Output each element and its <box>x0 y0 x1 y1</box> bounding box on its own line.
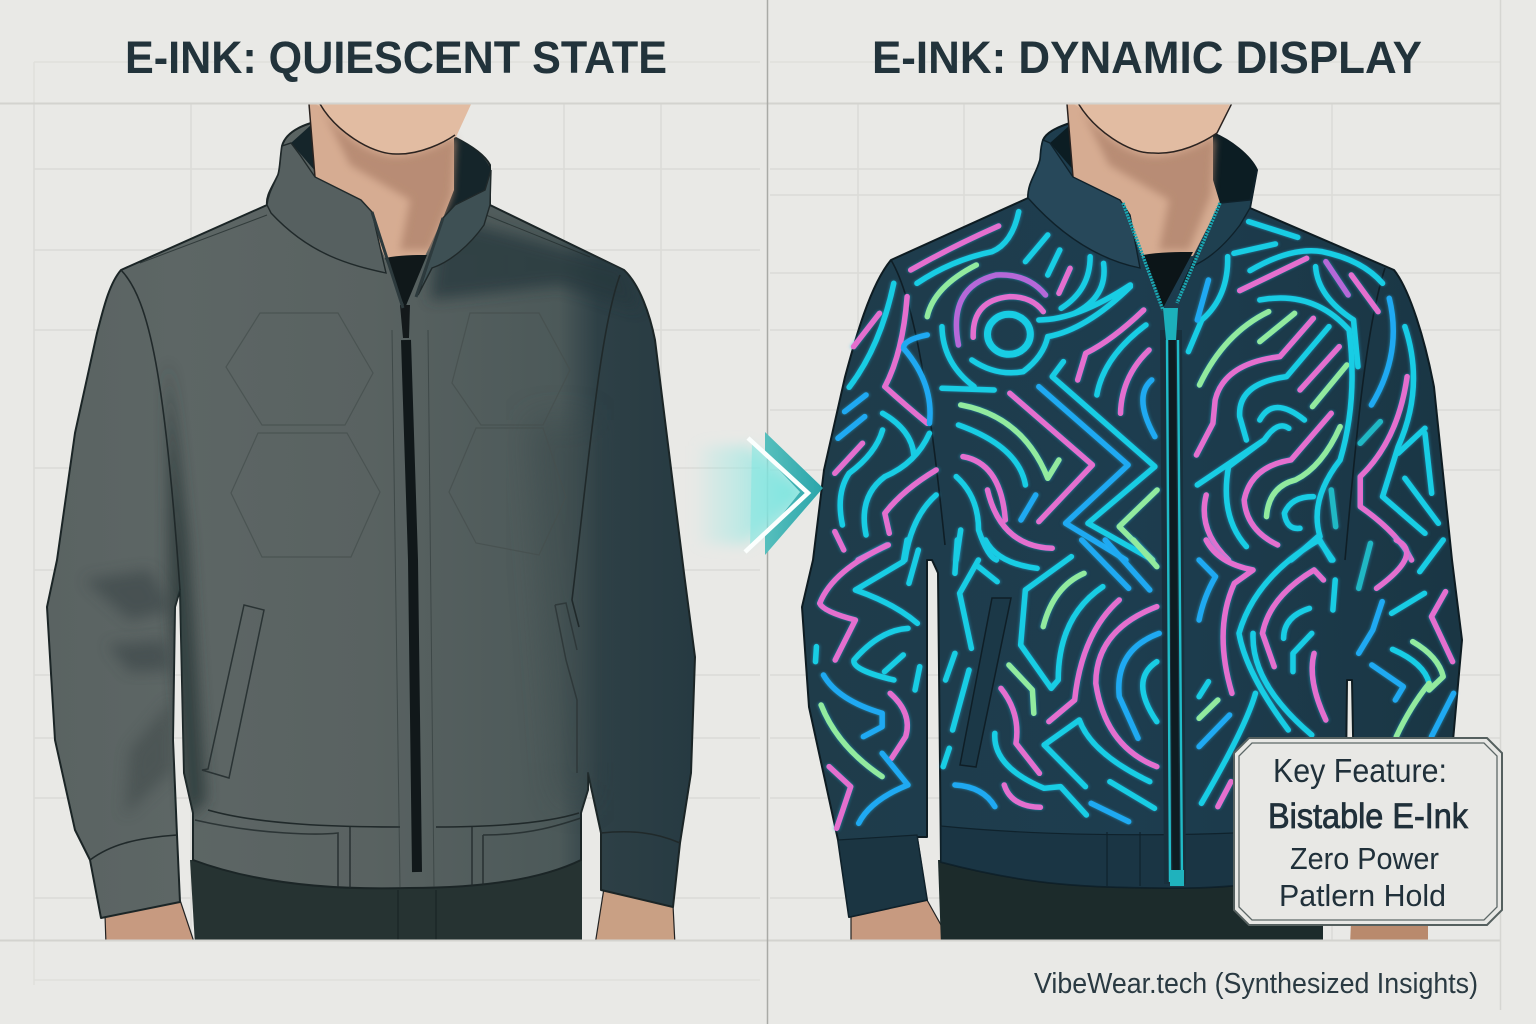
jacket body <box>47 123 695 918</box>
sleeve seams and cuffs <box>90 215 680 888</box>
arrow glow <box>695 446 804 544</box>
arrow white chevron <box>745 438 808 552</box>
callout inner frame <box>1239 743 1497 920</box>
hand right <box>595 892 676 940</box>
hand left <box>850 900 941 940</box>
band rules <box>0 104 1500 940</box>
zipper <box>1123 203 1220 882</box>
neck shadow <box>1081 108 1215 250</box>
pocket <box>960 598 1011 767</box>
trouser seam <box>398 890 436 945</box>
heading: quiescent state: E-INK: QUIESCENT STATE <box>125 32 667 83</box>
footer band <box>0 941 1536 1024</box>
lower right torso <box>1199 540 1335 807</box>
hem dividers <box>1107 832 1140 886</box>
pattern hold: Patlern Hold <box>1279 878 1446 913</box>
arrow body teal <box>765 432 823 555</box>
zipper pull <box>1163 308 1178 340</box>
cuff ribbing <box>838 835 927 917</box>
right cuff ribbing <box>1355 830 1445 905</box>
sleeve seams <box>891 260 1385 560</box>
right sleeve lower <box>1359 540 1454 737</box>
left sleeve upper <box>835 283 961 560</box>
bistable e-ink: Bistable E-Ink <box>1268 797 1468 836</box>
chin <box>317 104 471 154</box>
left sleeve lower <box>815 540 920 828</box>
arrow fill <box>750 442 800 550</box>
ribbed hem <box>940 826 1233 888</box>
zipper stop <box>1170 870 1184 886</box>
chin line <box>1067 103 1232 177</box>
zipper placket <box>1160 330 1186 884</box>
lower left torso <box>943 540 1159 822</box>
neck and face <box>1068 104 1220 256</box>
right shoulder and sleeve upper <box>1204 222 1438 560</box>
shading on jacket <box>85 215 640 820</box>
jacket body <box>802 123 1462 917</box>
source credit: VibeWear.tech (Synthesized Insights) <box>1034 968 1478 1000</box>
heading: dynamic display: E-INK: DYNAMIC DISPLAY <box>872 32 1422 83</box>
panel: dynamic jacket <box>802 100 1462 945</box>
pockets <box>202 603 577 778</box>
callout frame <box>1234 738 1502 925</box>
collar inside <box>1050 127 1256 202</box>
neon pattern upper <box>835 212 1438 560</box>
collar fronts <box>1028 140 1257 290</box>
panel: quiescent jacket <box>47 100 695 945</box>
chin line <box>309 104 455 177</box>
trousers <box>938 860 1323 945</box>
collar inside <box>291 125 491 215</box>
right edge rule <box>1500 0 1502 1010</box>
central chevrons <box>956 362 1157 560</box>
neck and face <box>310 104 454 258</box>
zipper <box>406 340 417 872</box>
right chest <box>1188 257 1352 547</box>
centre divider <box>766 0 768 1024</box>
zipper teeth top <box>372 212 443 308</box>
chin <box>1075 104 1230 154</box>
hand left <box>104 900 194 940</box>
upper left shoulder and swirl <box>911 212 1155 437</box>
zipper pull <box>400 305 410 338</box>
placket seams <box>392 330 434 887</box>
key feature label: Key Feature: <box>1273 752 1447 789</box>
sleeve wrinkles <box>92 569 166 620</box>
t-shirt <box>385 255 427 308</box>
title band <box>0 0 1536 103</box>
arrow: state transition <box>695 432 823 555</box>
t-shirt <box>1143 252 1193 308</box>
collar fronts <box>267 143 491 295</box>
callout: key feature <box>1234 738 1502 925</box>
zero power: Zero Power <box>1290 841 1439 876</box>
neon pattern lower <box>815 540 1454 828</box>
neck shadow <box>322 108 456 250</box>
trousers <box>190 860 582 940</box>
hexagon panels <box>226 313 570 557</box>
hand right <box>1350 926 1428 940</box>
